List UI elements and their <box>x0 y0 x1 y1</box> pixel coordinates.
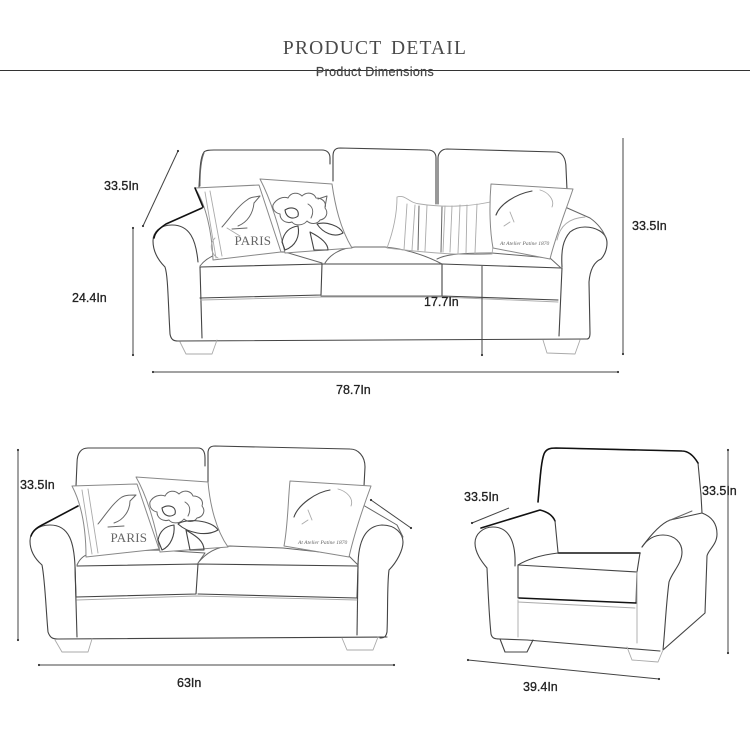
loveseat drawing <box>30 446 403 652</box>
pillow: Paris bird: PARIS <box>110 530 147 545</box>
loveseat labels: 63In <box>177 676 201 690</box>
back cushions <box>76 446 365 487</box>
pillow: plaid <box>387 196 498 255</box>
seat cushions <box>200 247 561 302</box>
armchair labels <box>464 484 737 694</box>
armchair dimension lines <box>467 449 729 680</box>
right arm <box>642 535 682 650</box>
legs <box>500 639 533 652</box>
pillow: Paris bird <box>195 185 281 260</box>
pillow: Paris bird: PARIS <box>234 233 271 248</box>
loveseat labels <box>20 478 201 690</box>
pillow: hummingbird: At Atelier Patine 1870 <box>499 241 549 247</box>
seat cushion <box>518 553 640 643</box>
left arm <box>475 527 660 651</box>
header rule <box>0 70 750 72</box>
three-seat labels: 24.4In <box>72 291 107 305</box>
pillow: Paris bird <box>72 484 159 557</box>
pillow: hummingbird: At Atelier Patine 1870 <box>297 540 347 546</box>
pillow: hummingbird <box>490 184 573 259</box>
armchair drawing <box>475 448 717 662</box>
seat cushions <box>75 546 358 600</box>
pillow: flowers <box>260 179 352 253</box>
three-seat labels: 17.7In <box>424 295 459 309</box>
three-seat labels: 33.5In <box>632 219 667 233</box>
armchair labels: 33.5In <box>464 490 499 504</box>
armchair labels: 39.4In <box>523 680 558 694</box>
loveseat dimension lines <box>17 449 412 666</box>
left arm <box>153 225 587 341</box>
three-seat labels: 78.7In <box>336 383 371 397</box>
three-seat dimension lines <box>132 138 624 373</box>
left arm <box>30 525 387 639</box>
three-seat labels: 33.5In <box>104 179 139 193</box>
three-seat sofa drawing <box>153 148 607 354</box>
right arm <box>562 227 607 339</box>
loveseat labels: 33.5In <box>20 478 55 492</box>
title: PRODUCT DETAIL <box>283 38 467 59</box>
armchair labels: 33.5In <box>702 484 737 498</box>
right arm <box>358 525 403 638</box>
back <box>538 448 717 650</box>
back cushions <box>199 148 567 204</box>
legs <box>55 637 378 652</box>
legs <box>180 340 580 354</box>
subtitle: Product Dimensions <box>316 65 434 79</box>
pillow: flowers <box>136 477 228 552</box>
three-seat labels <box>72 179 667 397</box>
pillow: hummingbird <box>284 481 371 557</box>
